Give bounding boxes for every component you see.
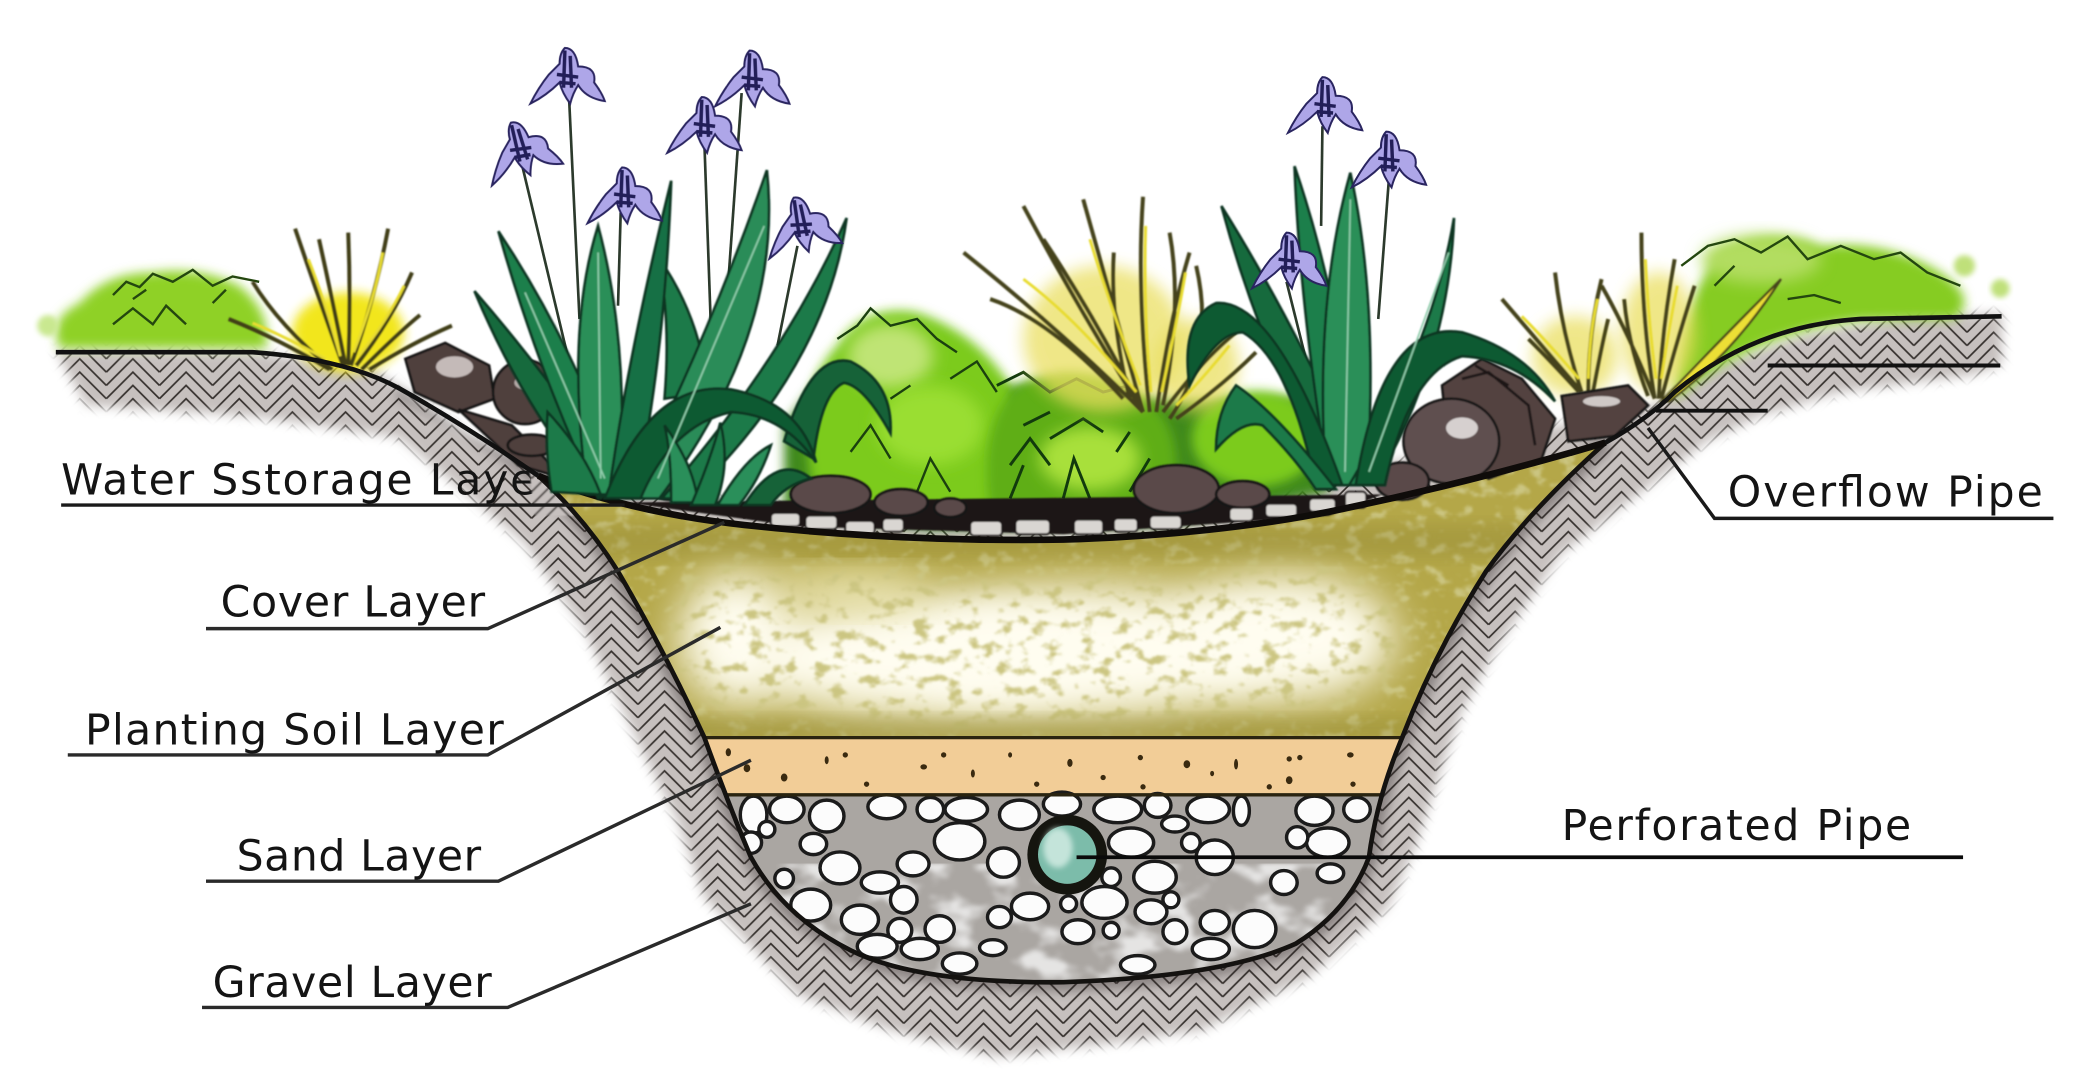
bush: basin ground fill: [784, 372, 1329, 529]
sand layer: [708, 739, 1399, 794]
cover and planting soil layer: [559, 449, 1595, 736]
leader: water storage layer: [61, 504, 625, 506]
icon: iris flower 3: [667, 97, 742, 153]
icon: iris flower 4: [477, 112, 564, 186]
label: water storage layer: Water Sstorage Layer: [61, 456, 556, 505]
callout: sand layer: Sand Layer: [237, 833, 482, 882]
hatching patch over end of water storage label: [528, 452, 591, 516]
left iris plant: [474, 170, 891, 505]
right iris plant: [1188, 166, 1555, 489]
grass: right small: [1502, 272, 1617, 396]
callout: perforated pipe: Perforated Pipe: [1562, 802, 1911, 851]
grass: right large: [1602, 233, 1781, 401]
bush: centre: [987, 372, 1176, 521]
callout: planting soil layer: [68, 627, 720, 755]
filter basin layers: [559, 449, 1595, 980]
rocks: basin floor: [625, 463, 1429, 534]
rocks: [405, 343, 1648, 536]
icon: iris flower 9: [1252, 233, 1326, 288]
callout: cover layer: [206, 522, 724, 629]
grass clumps: [229, 197, 1781, 419]
icon: iris flower 1: [530, 48, 605, 104]
gravel layer: [729, 790, 1379, 980]
ground surface lines: [56, 316, 2002, 476]
rocks: left slope: [405, 343, 565, 478]
basin outline: [538, 443, 1606, 982]
icon: perforated pipe: [1027, 815, 1107, 894]
callout: overflow pipe: [1648, 428, 2053, 518]
mulch line along basin top: [538, 443, 1606, 540]
icon: iris flower 7: [1288, 77, 1362, 133]
bush: far left: [37, 270, 267, 348]
callout: gravel layer: Gravel Layer: [213, 959, 492, 1008]
icon: iris flower 5: [587, 167, 662, 223]
rocks: right large: [1404, 359, 1648, 484]
icon: iris flower 2: [715, 51, 789, 106]
pebbles on basin top: [771, 492, 1366, 536]
icon: iris flower 8: [1352, 132, 1426, 187]
bush: centre left: [807, 308, 1019, 512]
callout: gravel layer: [202, 904, 751, 1008]
callout: sand layer: [206, 760, 751, 882]
callout: overflow pipe: Overflow Pipe: [1728, 468, 2043, 517]
callout: cover layer: Cover Layer: [221, 579, 486, 628]
bushes: [37, 235, 2010, 529]
layer divider lines: [665, 738, 1462, 795]
surrounding soil hatching: [40, 299, 2020, 1070]
icon: iris flower 6: [760, 191, 843, 259]
flower stems: [522, 93, 1389, 372]
grass: left: [229, 229, 452, 372]
grass: centre: [964, 197, 1256, 419]
bush: centre right: [1192, 391, 1320, 486]
upper ground shelf line on right: [1656, 366, 2000, 411]
bush: far right: [1675, 235, 2010, 399]
callout: planting soil layer: Planting Soil Layer: [85, 706, 504, 755]
